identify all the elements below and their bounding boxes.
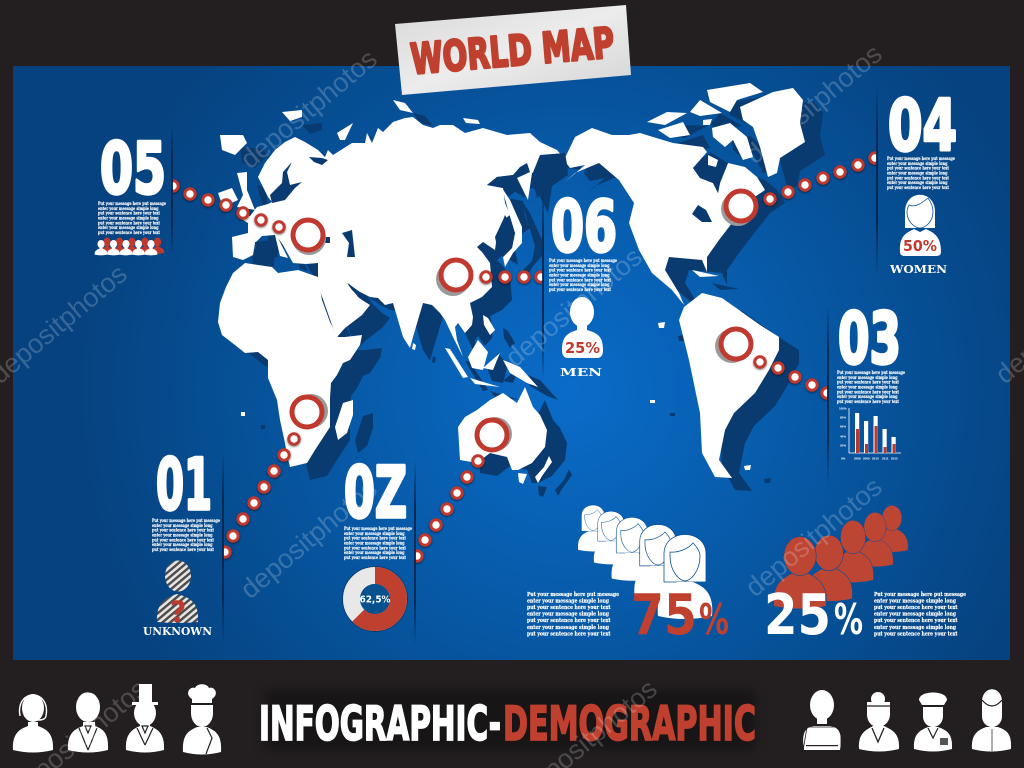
text block 05: Put your message here put message	[98, 202, 166, 207]
panel: section 02	[342, 452, 412, 632]
label UNKNOWN: UNKNOWN	[143, 625, 212, 638]
landmass: Britain and Ireland	[218, 172, 255, 210]
text block 05: put your sentence here your text	[98, 231, 160, 236]
bar chart: 2009	[863, 456, 870, 460]
text block 03	[837, 371, 905, 405]
world map	[218, 83, 825, 497]
watermarks: depositphotos	[500, 242, 648, 373]
text block 05: enter your message simple long	[98, 226, 158, 231]
text block 04: Put your message here put message	[887, 157, 955, 162]
text block 01: enter your message simple long	[152, 534, 212, 538]
text block: men: enter your message simple long	[874, 612, 956, 618]
text block: men: enter your message simple long	[874, 625, 956, 631]
bar chart: 60%	[840, 424, 846, 428]
text block 06: put your sentence here your text	[549, 278, 611, 283]
marker: Europe	[292, 220, 326, 255]
number 01: 01	[156, 444, 212, 526]
text block 05: enter your message simple long	[98, 216, 158, 222]
text block 02: enter your message simple long	[344, 532, 404, 537]
text block 02: put your sentence here your text	[344, 556, 406, 561]
bar chart: 2010	[872, 456, 879, 460]
icon: small people row	[95, 238, 164, 255]
number 03: 03	[838, 298, 901, 380]
bar chart: 20%	[840, 444, 846, 448]
footer title: DEMOGRAPHIC	[503, 697, 756, 752]
bar chart: 100%	[839, 406, 847, 410]
text block 06: enter your message simple long	[549, 274, 610, 278]
watermarks: depositphotos	[740, 472, 888, 603]
value 50%: 50%	[903, 237, 937, 255]
text block 04: enter your message simple long	[887, 181, 948, 186]
icon: man 25%	[562, 297, 603, 358]
text block: men: put your sentence here your text	[874, 618, 958, 624]
statistic 25%: %	[834, 595, 863, 644]
text block: women: enter your message simple long	[527, 612, 609, 618]
marker: Australia	[477, 417, 512, 451]
landmass: North Atlantic islands	[220, 100, 480, 155]
footer band shadow	[265, 690, 755, 750]
title: WORLD MAP	[409, 18, 616, 84]
text block 01: put your sentence here your text	[152, 529, 214, 534]
landmass: North America	[564, 128, 765, 305]
landmass: Southeast Asian islands	[412, 315, 538, 387]
text block: men: put your sentence here your text	[874, 631, 958, 637]
donut chart 62,5%	[342, 566, 408, 632]
text block 05	[98, 202, 166, 236]
text block 05: put your sentence here your text	[98, 212, 160, 217]
text block 03: enter your message simple long	[837, 386, 898, 390]
icon: woman 50%	[900, 195, 941, 256]
statistic 25%: 25	[764, 583, 831, 648]
bar chart: 0%	[841, 456, 846, 460]
icon: businessman	[68, 692, 108, 752]
text block 06: Put your message here put message	[549, 259, 617, 264]
landmass: South America	[679, 293, 779, 478]
bar chart: 2008	[854, 456, 861, 460]
landmass: Madagascar	[335, 400, 353, 440]
title card	[395, 5, 631, 95]
text block 03: put your sentence here your text	[837, 390, 899, 395]
text block 01: Put your message here put message	[152, 519, 220, 524]
text block 03: put your sentence here your text	[837, 381, 899, 386]
text block 01: put your sentence here your text	[152, 538, 214, 543]
text block 06	[549, 259, 617, 293]
text block 01: put your sentence here your text	[152, 548, 214, 553]
icon: worker	[972, 689, 1011, 752]
text block 06: put your sentence here your text	[549, 269, 611, 274]
landmass: Eurasia	[232, 117, 563, 357]
marker: South America	[715, 329, 751, 363]
text block 01: enter your message simple long	[152, 543, 212, 548]
icon: chef	[183, 684, 221, 754]
text block 03: enter your message simple long	[837, 376, 898, 381]
text block: women: put your sentence here your text	[527, 618, 611, 624]
donut value: 62,5%	[360, 594, 391, 606]
text block 04: put your sentence here your text	[887, 186, 949, 191]
icon: top hat man	[126, 684, 164, 752]
route: 04 dots	[765, 153, 880, 204]
route: 06 dots	[481, 272, 546, 282]
text block 01: enter your message simple long	[152, 524, 212, 529]
landmass: Japan and Sakhalin	[502, 188, 522, 267]
marker: Africa	[292, 394, 328, 428]
landmass: small islands	[241, 270, 751, 470]
landmass: Tasmania	[518, 473, 527, 484]
text block: women	[527, 592, 619, 637]
icon: crowd of women	[578, 505, 712, 619]
text block: women: enter your message simple long	[527, 599, 609, 605]
route: 01 dots	[220, 434, 299, 557]
text block 06: enter your message simple long	[549, 283, 610, 288]
inland seas and lakes	[255, 152, 728, 300]
text block 04: enter your message simple long	[887, 162, 948, 167]
panel: section 04	[887, 85, 957, 276]
watermarks: depositphotos	[740, 39, 888, 170]
bar chart: 80%	[840, 416, 846, 420]
icon: laptop user	[803, 690, 841, 751]
text block 04: put your sentence here your text	[887, 167, 949, 172]
bar chart: 2012	[891, 456, 898, 460]
panel: section 01	[143, 444, 220, 638]
icon: call agent	[13, 694, 53, 752]
statistic 75%: %	[699, 595, 729, 644]
icon: crowd of men	[774, 505, 908, 609]
panel: blue world map background	[13, 66, 1010, 660]
text block 06: put your sentence here your text	[549, 288, 611, 293]
text block 05: put your sentence here your text	[98, 221, 160, 226]
landmass: Australia	[458, 387, 547, 470]
watermarks: depositphotos	[235, 474, 383, 605]
text block: men	[874, 592, 966, 637]
statistic 75%: 75	[631, 583, 697, 648]
Southampton island	[708, 155, 718, 167]
number 06: 06	[551, 186, 617, 268]
text block 02: enter your message simple long	[344, 542, 404, 546]
text block 04	[887, 157, 955, 191]
text block 02	[344, 527, 412, 561]
text block 02: Put your message here put message	[344, 527, 412, 532]
icon: police officer	[914, 692, 952, 752]
question mark: ?	[170, 595, 186, 629]
panel: section 05	[95, 128, 166, 255]
marker: Asia	[436, 260, 471, 296]
text block: men: Put your message here put message	[874, 592, 966, 598]
route: 02 dots	[412, 456, 483, 561]
number 05: 05	[100, 128, 166, 210]
label WOMEN: WOMEN	[889, 263, 947, 276]
text block 02: enter your message simple long	[344, 551, 404, 556]
watermarks: depositphotos	[235, 44, 383, 175]
bar chart	[839, 406, 901, 460]
text block 03: enter your message simple long	[837, 395, 898, 400]
landmass: New Zealand	[535, 456, 552, 483]
text block: men: enter your message simple long	[874, 599, 956, 605]
text block 03: put your sentence here your text	[837, 400, 899, 405]
text block: men: put your sentence here your text	[874, 605, 958, 611]
text block 06: enter your message simple long	[549, 264, 610, 269]
text block 02: put your sentence here your text	[344, 546, 406, 551]
number 02: 0Z	[344, 452, 407, 534]
landmass: Canadian Arctic islands	[647, 83, 763, 160]
text block 01	[152, 519, 220, 553]
text block: women: enter your message simple long	[527, 625, 609, 631]
text block: women: put your sentence here your text	[527, 631, 611, 637]
dividers	[171, 125, 173, 255]
panel: section 06	[549, 186, 617, 379]
label MEN: MEN	[560, 366, 602, 379]
value 25%: 25%	[565, 339, 600, 357]
marker: North America	[721, 191, 756, 226]
text block 03: Put your message here put message	[837, 371, 905, 376]
panel: section 03	[837, 298, 905, 460]
number 04: 04	[888, 85, 957, 167]
icon: doctor	[859, 692, 899, 752]
continents	[218, 83, 805, 484]
landmass: Greenland	[740, 88, 805, 177]
bar chart: 2011	[882, 456, 889, 460]
text block 02: put your sentence here your text	[344, 537, 406, 542]
text block 04: put your sentence here your text	[887, 176, 949, 181]
footer title: INFOGRAPHIC-	[259, 697, 501, 752]
text block 04: enter your message simple long	[887, 172, 948, 176]
landmass: Africa	[218, 263, 362, 467]
text block: women: Put your message here put message	[527, 592, 619, 598]
route: 05 dots	[168, 181, 284, 232]
text block 05: enter your message simple long	[98, 207, 158, 212]
route: 03 dots	[755, 357, 832, 398]
text block: women: put your sentence here your text	[527, 605, 611, 611]
icon: unknown person	[157, 560, 198, 629]
bar chart: 40%	[840, 434, 846, 438]
